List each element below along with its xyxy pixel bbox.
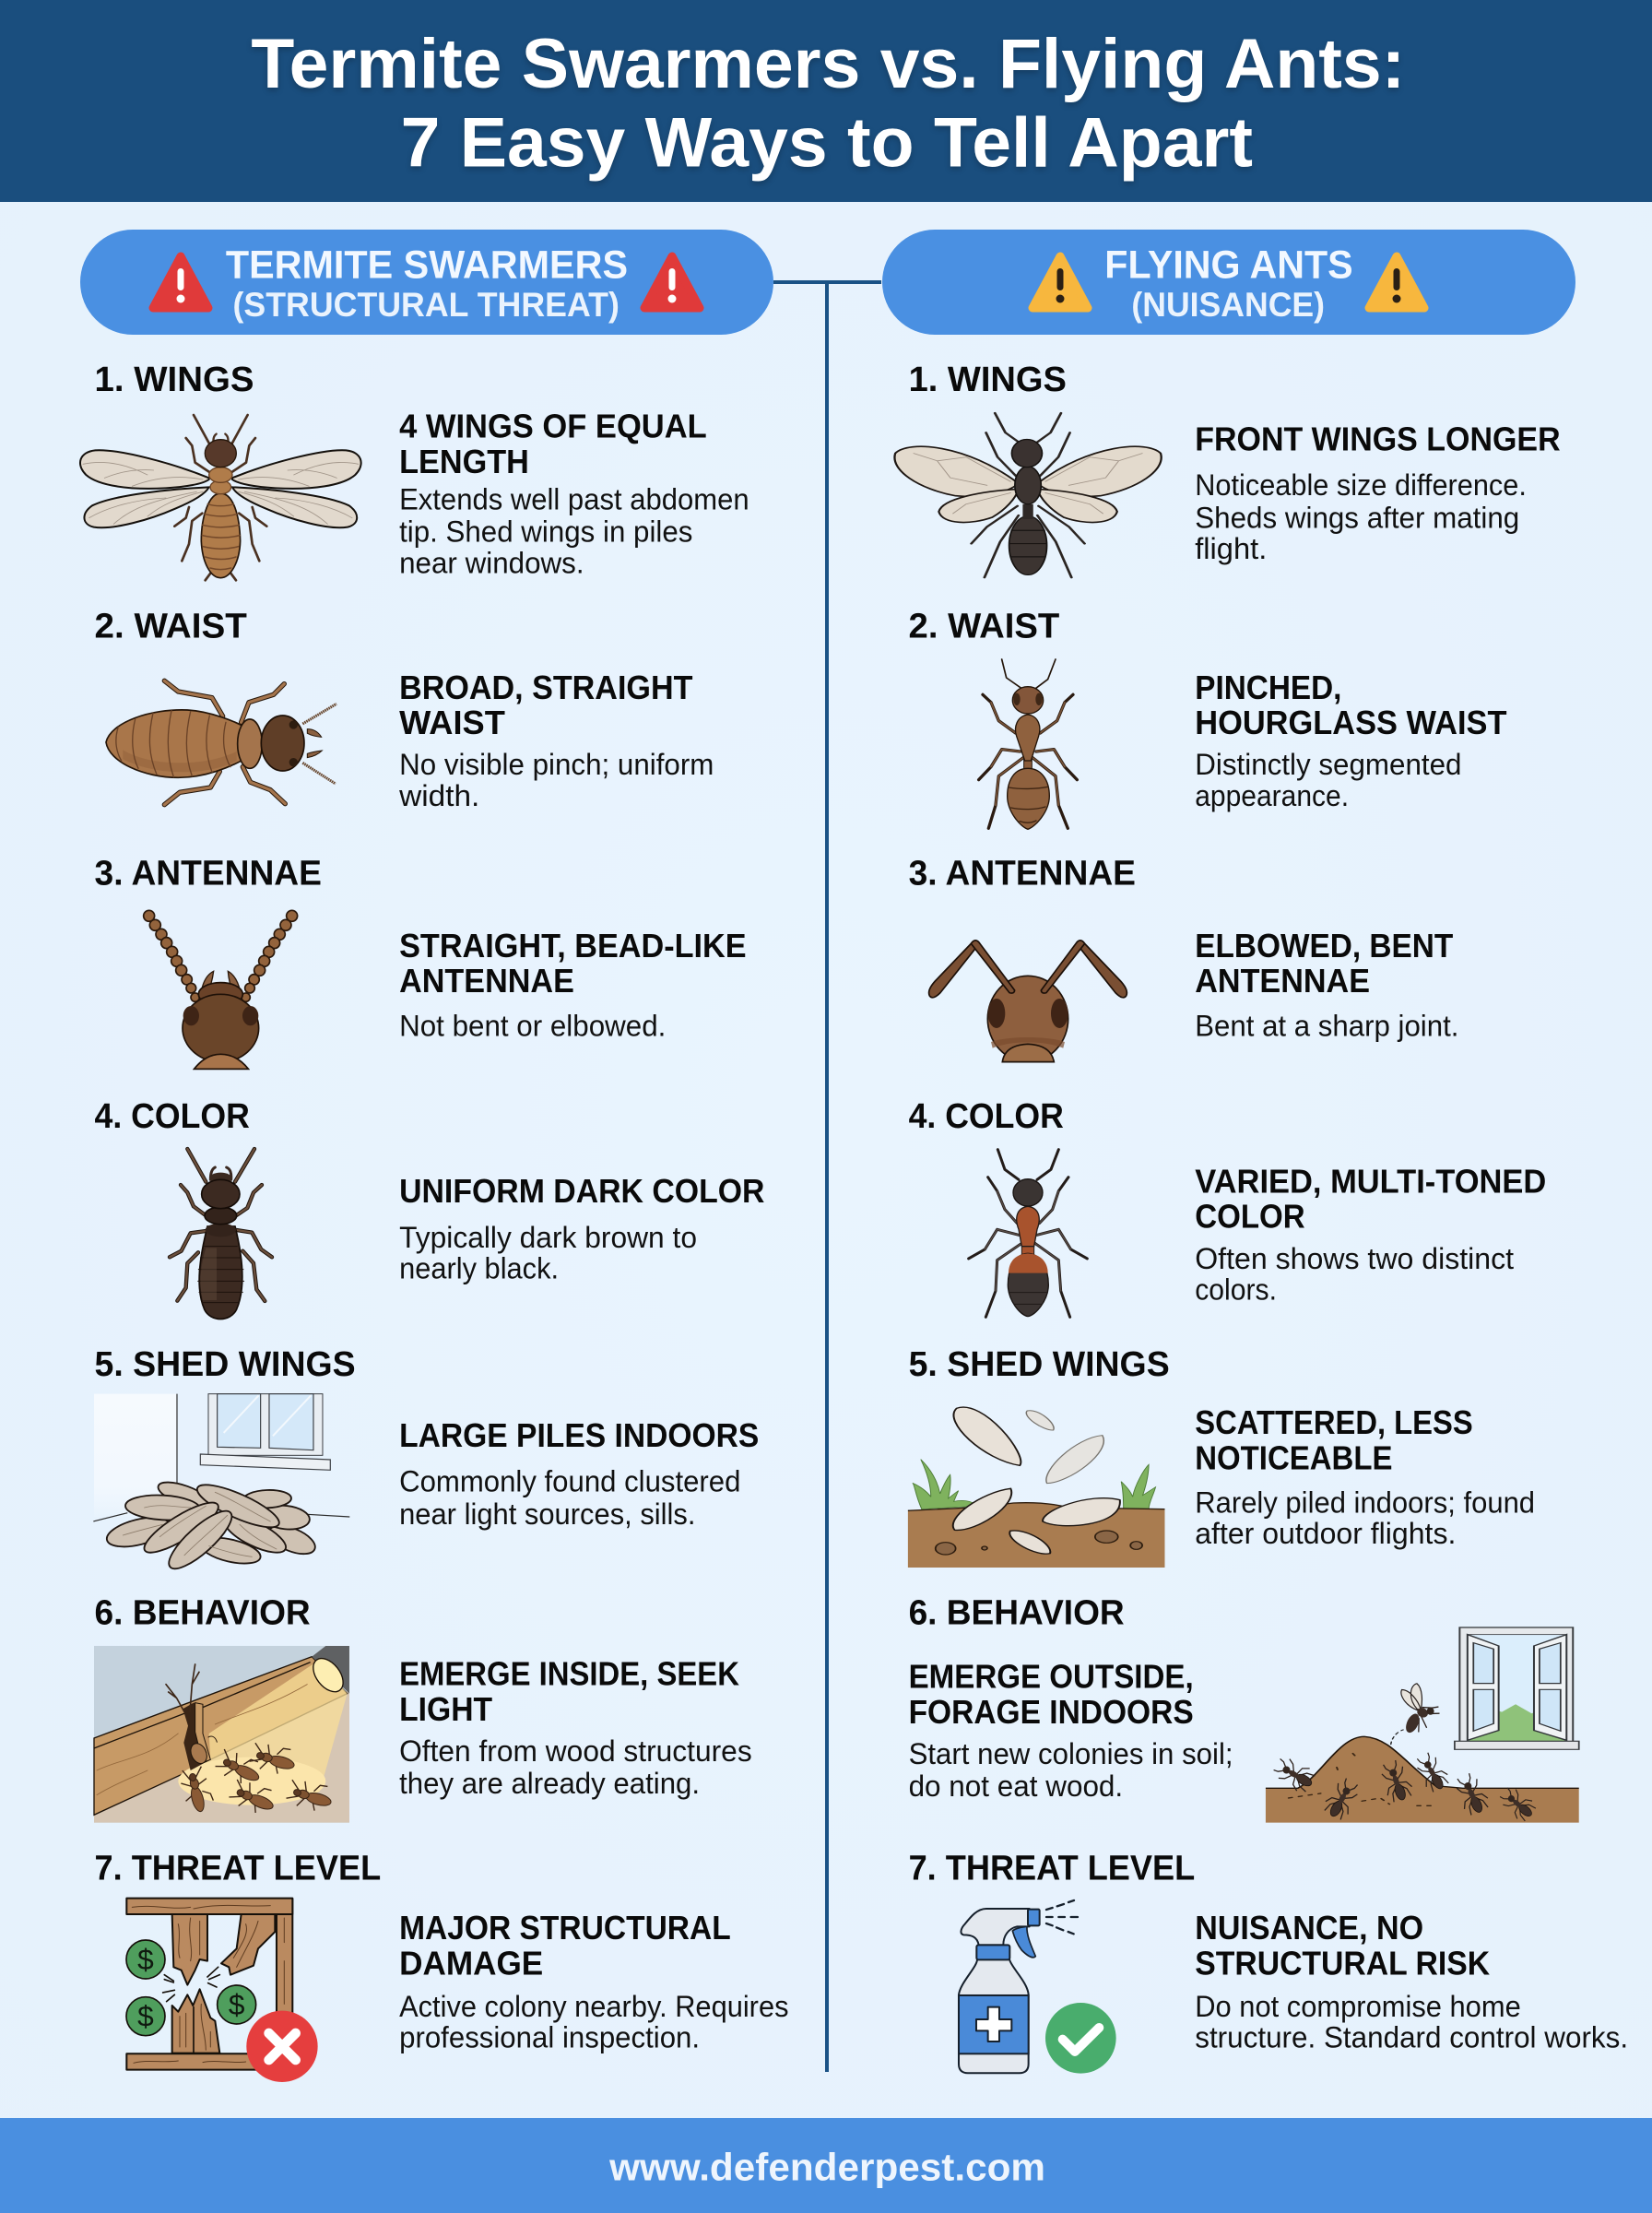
description xyxy=(1195,1162,1546,1306)
description: tip. Shed wings in piles xyxy=(399,515,692,549)
description: professional inspection. xyxy=(399,2021,700,2054)
heading: 6. BEHAVIOR xyxy=(95,1592,311,1632)
pill text: TERMITE SWARMERS xyxy=(226,243,628,287)
heading: 7. THREAT LEVEL xyxy=(909,1848,1195,1888)
description xyxy=(398,669,714,812)
description: near windows. xyxy=(399,546,584,579)
footer url: www.defenderpest.com xyxy=(608,2146,1045,2188)
description: EMERGE INSIDE, SEEK xyxy=(399,1655,739,1693)
description: DAMAGE xyxy=(399,1944,543,1982)
description xyxy=(399,1909,788,2054)
row: 6 behavior xyxy=(909,1592,1579,1824)
pill text: (STRUCTURAL THREAT) xyxy=(233,286,620,324)
description: UNIFORM DARK COLOR xyxy=(399,1172,765,1210)
row: 7 threat level xyxy=(909,1848,1628,2074)
description: Do not compromise home xyxy=(1195,1990,1521,2023)
description: Not bent or elbowed. xyxy=(399,1009,666,1042)
icon: red warning triangle left xyxy=(153,256,208,308)
heading: 1. WINGS xyxy=(95,360,254,399)
description: Typically dark brown to xyxy=(399,1221,697,1254)
icon: yellow warning triangle left xyxy=(1032,256,1088,308)
icon: broken beams with money and red x: $ xyxy=(137,2000,154,2033)
heading: 4. COLOR xyxy=(95,1096,250,1136)
icon: spray bottle with green check xyxy=(959,1900,1116,2074)
description: Sheds wings after mating xyxy=(1195,501,1519,534)
description: LENGTH xyxy=(399,443,529,480)
description: Rarely piled indoors; found xyxy=(1195,1486,1535,1520)
heading: 4. COLOR xyxy=(909,1096,1064,1136)
title: Termite Swarmers vs. Flying Ants: xyxy=(251,25,1405,103)
description: nearly black. xyxy=(399,1252,559,1285)
description xyxy=(1195,1909,1628,2054)
description xyxy=(1195,1403,1535,1550)
description: Distinctly segmented xyxy=(1195,748,1461,781)
pill text xyxy=(226,243,628,324)
row: 4 color xyxy=(909,1096,1546,1317)
description xyxy=(909,1658,1233,1803)
description: LIGHT xyxy=(399,1690,492,1728)
description: width. xyxy=(398,779,479,812)
heading: 2. WAIST xyxy=(909,607,1059,646)
icon: yellow warning triangle right xyxy=(1369,256,1424,308)
row: 5 shed wings xyxy=(908,1344,1535,1568)
pill header: termite swarmers xyxy=(80,230,773,335)
heading: 7. THREAT LEVEL xyxy=(95,1848,381,1888)
description: near light sources, sills. xyxy=(399,1497,695,1531)
description: ELBOWED, BENT xyxy=(1195,927,1453,964)
description: PINCHED, xyxy=(1195,669,1341,706)
icon: scattered wings on soil xyxy=(908,1407,1164,1568)
icon: termite broad waist xyxy=(106,680,336,805)
row: 7 threat level xyxy=(95,1848,788,2082)
description: after outdoor flights. xyxy=(1195,1517,1456,1550)
description: Often shows two distinct xyxy=(1195,1242,1514,1275)
pill text xyxy=(1104,243,1353,324)
pill text: FLYING ANTS xyxy=(1104,243,1353,287)
description: FRONT WINGS LONGER xyxy=(1195,420,1561,458)
title: 7 Easy Ways to Tell Apart xyxy=(401,104,1253,183)
description: Active colony nearby. Requires xyxy=(399,1990,788,2023)
description: VARIED, MULTI-TONED xyxy=(1195,1162,1546,1200)
pill header: flying ants xyxy=(882,230,1575,335)
description: NOTICEABLE xyxy=(1195,1438,1393,1476)
description xyxy=(399,927,747,1042)
description xyxy=(1195,669,1507,812)
icon: termites emerging from wood toward light xyxy=(94,1646,349,1823)
row: 1 wings xyxy=(80,360,749,580)
description: MAJOR STRUCTURAL xyxy=(399,1909,731,1947)
panel: flying ants column xyxy=(882,230,1628,2074)
description: do not eat wood. xyxy=(909,1769,1123,1803)
description: structure. Standard control works. xyxy=(1195,2021,1628,2054)
icon: two-toned ant xyxy=(969,1150,1087,1317)
description: flight. xyxy=(1195,532,1267,565)
description: Noticeable size difference. xyxy=(1195,468,1527,502)
description xyxy=(1195,420,1561,565)
description: STRUCTURAL RISK xyxy=(1195,1944,1490,1982)
row: 6 behavior xyxy=(94,1592,752,1823)
heading: 6. BEHAVIOR xyxy=(909,1592,1125,1632)
description: FORAGE INDOORS xyxy=(909,1693,1194,1731)
description: ANTENNAE xyxy=(1195,962,1370,1000)
description: Commonly found clustered xyxy=(399,1465,740,1498)
row: 1 wings xyxy=(894,360,1561,577)
description: they are already eating. xyxy=(399,1767,700,1800)
row: 2 waist xyxy=(909,607,1507,829)
description: SCATTERED, LESS xyxy=(1195,1403,1473,1441)
description: 4 WINGS OF EQUAL xyxy=(399,408,707,445)
heading: 5. SHED WINGS xyxy=(95,1344,356,1384)
description xyxy=(399,1655,752,1800)
description xyxy=(399,1172,765,1285)
heading: 2. WAIST xyxy=(95,607,247,646)
icon: winged ant xyxy=(894,413,1162,577)
description: BROAD, STRAIGHT xyxy=(399,669,692,706)
center divider with connectors xyxy=(773,282,881,2072)
heading: 1. WINGS xyxy=(909,360,1067,399)
icon: ant mound and open window xyxy=(1266,1627,1579,1824)
description: appearance. xyxy=(1195,779,1349,812)
description: LARGE PILES INDOORS xyxy=(399,1416,759,1454)
icon: broken beams with money and red x: $ xyxy=(229,1988,245,2021)
icon: winged termite xyxy=(80,415,361,580)
description: Extends well past abdomen xyxy=(399,482,749,515)
description: Start new colonies in soil; xyxy=(909,1737,1233,1770)
icon: ant pinched waist xyxy=(979,659,1077,829)
icon: red warning triangle right xyxy=(644,256,700,308)
description: colors. xyxy=(1195,1272,1277,1306)
icon: termite head with beaded antennae xyxy=(144,910,298,1069)
row: 2 waist xyxy=(95,607,714,812)
description: ANTENNAE xyxy=(399,962,574,1000)
row: 5 shed wings xyxy=(93,1344,759,1577)
icon: broken beams with money and red x xyxy=(126,1899,318,2082)
icon: broken beams with money and red x: $ xyxy=(137,1943,154,1976)
row: 3 antennae xyxy=(95,854,747,1069)
description: Often from wood structures xyxy=(399,1734,752,1768)
heading: 3. ANTENNAE xyxy=(95,854,322,893)
header banner xyxy=(0,0,1652,202)
panel: termite swarmers column xyxy=(80,230,788,2082)
description xyxy=(1195,927,1458,1042)
description: HOURGLASS WAIST xyxy=(1195,704,1507,741)
heading: 3. ANTENNAE xyxy=(909,854,1136,893)
description: NUISANCE, NO xyxy=(1195,1909,1423,1947)
description: EMERGE OUTSIDE, xyxy=(909,1658,1194,1696)
description: Bent at a sharp joint. xyxy=(1195,1009,1458,1042)
description: STRAIGHT, BEAD-LIKE xyxy=(399,927,747,964)
description: COLOR xyxy=(1195,1198,1305,1236)
footer bar xyxy=(0,2118,1652,2213)
icon: dark termite xyxy=(170,1149,272,1319)
icon: window with pile of shed wings xyxy=(93,1394,349,1577)
description xyxy=(399,408,749,579)
icon: ant head with elbowed antennae xyxy=(929,941,1127,1062)
pill text: (NUISANCE) xyxy=(1131,286,1325,324)
description: No visible pinch; uniform xyxy=(399,748,714,781)
description xyxy=(399,1416,759,1531)
row: 3 antennae xyxy=(909,854,1458,1062)
title xyxy=(251,25,1405,183)
row: 4 color xyxy=(95,1096,765,1319)
description: WAIST xyxy=(399,704,505,741)
heading: 5. SHED WINGS xyxy=(909,1344,1170,1384)
